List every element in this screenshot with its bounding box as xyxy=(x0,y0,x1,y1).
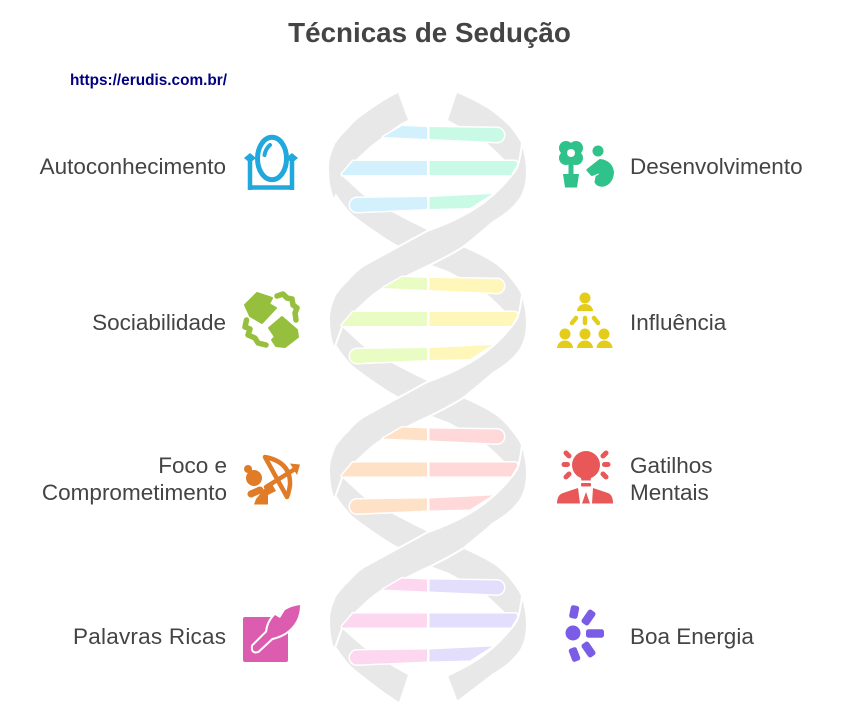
rungs: Autoconhecimento / Desenvolvimento xyxy=(342,126,517,212)
icon: light bulb head xyxy=(557,451,613,504)
back strand 2 xyxy=(335,327,523,468)
icon: two hands with wavy lines xyxy=(245,293,298,347)
front strand: bottom right cut xyxy=(447,596,527,702)
front strand 2 xyxy=(329,294,527,500)
label: Influência: Influência xyxy=(630,310,727,335)
icon: people pyramid xyxy=(557,292,612,348)
label: Palavras Ricas: Palavras Ricas xyxy=(73,624,226,649)
label: Foco e Comprometimento: Comprometimento xyxy=(42,480,227,505)
back strand 3 xyxy=(335,478,523,618)
label: Gatilhos Mentais xyxy=(630,453,713,505)
label: Foco e Comprometimento xyxy=(42,453,227,505)
label: Gatilhos Mentais: Mentais xyxy=(630,480,709,505)
front strand: top left cut xyxy=(329,93,408,198)
front strand 3 xyxy=(329,444,527,650)
icon: mirror xyxy=(244,137,298,190)
icon: energy burst xyxy=(566,605,604,663)
icon: quill on page xyxy=(243,605,300,662)
label: Foco e Comprometimento: Foco e xyxy=(158,453,227,478)
label: Boa Energia: Boa Energia xyxy=(630,624,754,649)
back strand 1 xyxy=(335,176,523,317)
label: Autoconhecimento: Autoconhecimento xyxy=(40,154,226,179)
back strand: bottom left cut xyxy=(335,628,408,702)
rungs: Foco e Comprometimento / Gatilhos Mentais xyxy=(342,428,517,514)
DNA helix backbone xyxy=(329,93,527,702)
title: Técnicas de Sedução xyxy=(288,17,571,48)
back strand: top right cut xyxy=(448,93,523,162)
rungs: Palavras Ricas / Boa Energia xyxy=(342,578,517,664)
source link: https://erudis.com.br/ xyxy=(70,72,228,89)
rungs: Sociabilidade / Influência xyxy=(342,277,517,363)
label: Gatilhos Mentais: Gatilhos xyxy=(630,453,713,478)
icon: flower and person xyxy=(559,141,612,188)
label: Desenvolvimento: Desenvolvimento xyxy=(630,154,803,179)
icon: archer xyxy=(244,457,300,504)
front strand 1 xyxy=(329,143,527,349)
label: Sociabilidade: Sociabilidade xyxy=(92,310,226,335)
